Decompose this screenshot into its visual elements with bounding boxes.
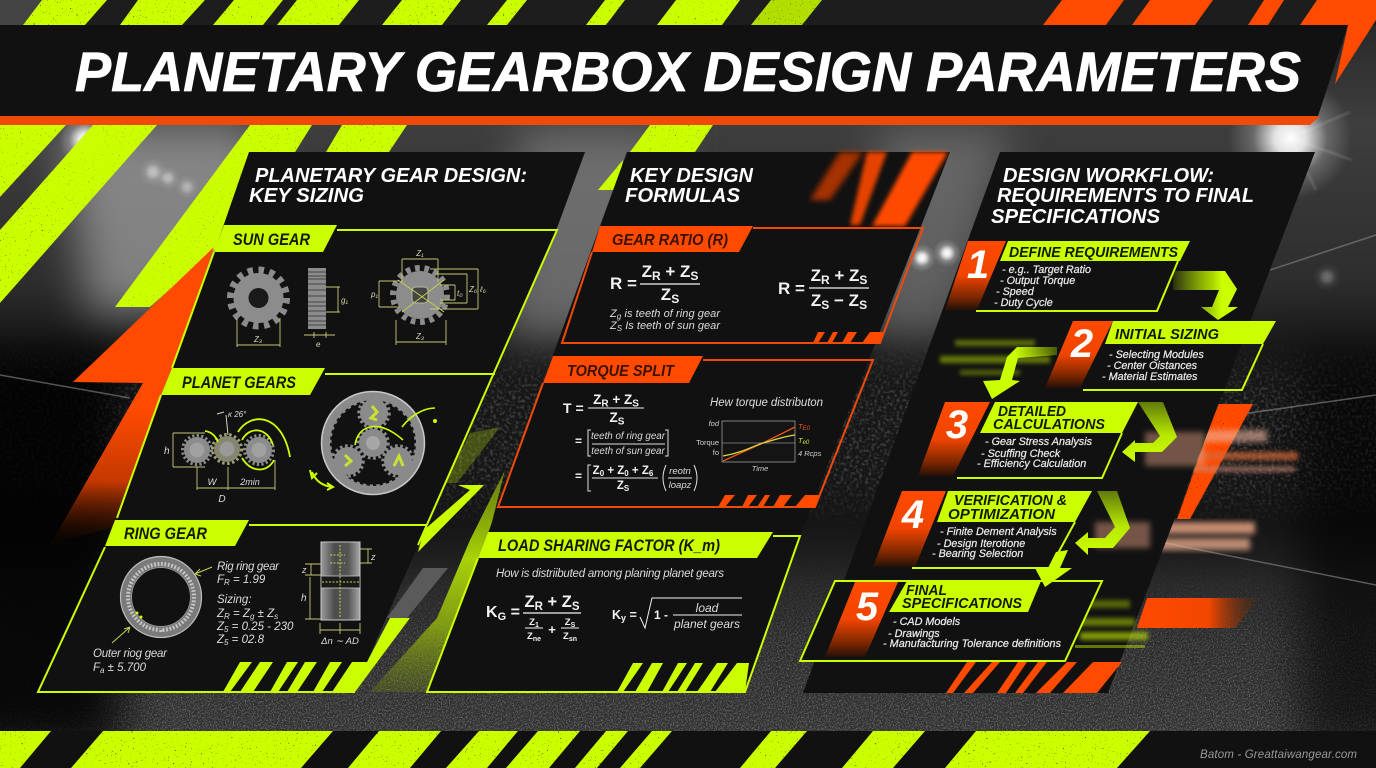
icon: planet gear row with dimensions	[164, 410, 290, 505]
step 5 final specifications: - Drawings	[888, 628, 940, 640]
gear ratio formula right: − Z	[829, 291, 859, 310]
torque formula: + Z	[609, 392, 632, 407]
torque formula: 6	[649, 469, 654, 478]
step 2 initial sizing: 2	[1070, 322, 1093, 366]
arrow: step 2 to 3	[983, 347, 1057, 399]
icon: ring gear	[112, 556, 212, 643]
ring gear notes: 5	[224, 638, 229, 647]
step 1 define requirements: - Duty Cycle	[994, 297, 1053, 309]
step 5 final specifications: SPECIFICATIONS	[902, 596, 1022, 612]
gear ratio formula right: R	[821, 273, 830, 287]
panel heading: SPECIFICATIONS	[991, 206, 1161, 228]
load formula K_G: sn	[569, 636, 577, 643]
torque distribution chart: Hew torque distributon	[710, 397, 823, 409]
blurred motion streaks	[1125, 430, 1298, 550]
torque formula: teeth of ring gear	[591, 431, 666, 442]
ring gear notes	[93, 561, 294, 675]
torque formula	[563, 392, 697, 493]
torque split box	[498, 356, 873, 507]
sun gear tab: SUN GEAR	[233, 231, 310, 249]
icon: ring gear cross section: z	[301, 565, 307, 575]
gear ratio formula right: S	[821, 298, 829, 312]
gear ratio legend	[609, 308, 721, 333]
icon: sun gear dimensioned view: Z₃	[415, 332, 424, 341]
torque formula: + Z	[629, 465, 649, 477]
icon: sun gear dimensioned view: Z₁	[415, 249, 424, 258]
load formula K_G: =	[506, 604, 520, 621]
torque distribution chart: e0	[803, 440, 810, 446]
panel heading: DESIGN WORKFLOW:	[1003, 165, 1214, 187]
gear ratio formula right: Z	[811, 266, 821, 285]
icon: ring gear cross section: Δn ∼ AD	[320, 636, 359, 647]
step 5 final specifications: 5	[856, 585, 879, 629]
torque formula: teeth of sun gear	[591, 446, 666, 457]
gear ratio formula left: Z	[642, 262, 652, 281]
gear ratio formula left: R =	[610, 274, 637, 293]
torque formula: Z	[610, 410, 618, 425]
corner stripes	[223, 618, 410, 692]
step 5 final specifications: - CAD Models	[893, 616, 961, 628]
ring gear notes: = 1.99	[230, 574, 266, 586]
icon: sun gear side view: e	[316, 340, 321, 349]
torque formula: Z	[617, 480, 624, 492]
gear ratio legend: Z	[610, 320, 617, 332]
arrow: step 1 to 2	[1173, 271, 1238, 320]
torque formula: S	[624, 484, 630, 493]
step 2 initial sizing	[1045, 321, 1276, 390]
ring gear notes: = Z	[230, 608, 251, 620]
gear ratio tab: GEAR RATIO (R)	[612, 232, 728, 249]
load formula K_G: +	[548, 622, 556, 637]
icon: planet gear row with dimensions: 2min	[239, 477, 260, 487]
torque distribution chart: fod	[709, 419, 720, 428]
step 2 initial sizing: - Material Estimates	[1102, 371, 1198, 383]
load formula K_G: S	[572, 601, 580, 613]
gear ratio legend: Is teeth of sun gear	[622, 320, 721, 332]
icon: sun gear front view: Z₃	[253, 335, 262, 344]
gear ratio formula left: + Z	[661, 262, 690, 281]
gear ratio legend: S	[617, 324, 623, 333]
corner stripes	[617, 663, 749, 692]
icon: planet gear row with dimensions: W	[208, 477, 218, 488]
panel heading	[625, 165, 754, 207]
load formula K_G: R	[535, 601, 544, 613]
gear ratio formula left	[610, 262, 700, 306]
load formula K_G: S	[571, 622, 576, 629]
load formula K_G: Z	[565, 617, 571, 628]
torque formula: 0	[624, 469, 629, 478]
step 3 detailed calculations: 3	[946, 403, 968, 447]
ring gear notes: R	[224, 612, 230, 621]
load formula K_y	[612, 598, 742, 631]
torque formula: S	[632, 398, 639, 410]
arrow: step 4 to 5	[1035, 550, 1072, 587]
ring gear notes: F	[217, 574, 224, 586]
corner stripes	[813, 332, 883, 343]
panel: key design formulas	[487, 152, 950, 536]
gear ratio formula right: R =	[778, 279, 805, 298]
icon: sun gear side view: g₁	[341, 296, 348, 305]
lime bolt	[418, 485, 484, 552]
torque formula: loapz	[669, 480, 692, 491]
panel heading: PLANETARY GEAR DESIGN:	[255, 165, 527, 187]
ring gear notes: Rig ring gear	[217, 561, 280, 573]
icon: sun gear dimensioned view: p₁	[370, 290, 378, 299]
load formula K_y: =	[626, 608, 637, 622]
gear ratio legend: Z	[610, 308, 617, 320]
gear ratio formula left: S	[690, 269, 698, 283]
gear ratio formula right: S	[859, 273, 867, 287]
icon: sun gear side view	[304, 268, 348, 349]
arrow: step 3 feedback	[1122, 402, 1177, 462]
planet gears tab: PLANET GEARS	[182, 374, 296, 392]
panel heading: FORMULAS	[625, 185, 741, 207]
ring gear notes: Z	[217, 608, 224, 620]
panel heading	[991, 165, 1254, 228]
step 2 initial sizing: - Selecting Modules	[1109, 349, 1204, 361]
torque formula: 0	[600, 469, 605, 478]
step 1 define requirements: 1	[967, 243, 989, 287]
load formula K_y: load	[696, 601, 719, 615]
load formula K_G: Z	[563, 631, 569, 642]
torque formula: Z	[593, 465, 600, 477]
ring gear notes: ± 5.700	[104, 662, 147, 674]
step 3 detailed calculations: - Scuffing Check	[981, 448, 1061, 460]
step 1 define requirements: DEFINE REQUIREMENTS	[1009, 245, 1178, 261]
torque distribution chart: 4 Rcps	[798, 449, 822, 458]
step 3 detailed calculations: - Gear Stress Analysis	[985, 436, 1093, 448]
ring gear tab: RING GEAR	[124, 525, 207, 543]
gear ratio formula right: + Z	[830, 266, 859, 285]
torque formula: =	[575, 434, 582, 448]
load formula K_G: K	[486, 604, 498, 621]
panel heading: KEY SIZING	[249, 185, 364, 207]
icon: ring gear cross section	[301, 542, 376, 647]
step 4 verification and optimization	[873, 491, 1092, 568]
ring gear notes: = 02.8	[228, 634, 265, 646]
step 2 initial sizing: INITIAL SIZING	[1115, 326, 1219, 343]
ring gear notes: F	[93, 662, 100, 674]
step 3 detailed calculations: CALCULATIONS	[993, 417, 1105, 433]
torque split tab: TORQUE SPLIT	[567, 363, 675, 380]
gear ratio tab	[592, 226, 753, 252]
load formula K_G: + Z	[543, 593, 572, 611]
ring gear notes: Outer riog gear	[93, 648, 168, 660]
torque distribution chart: T	[798, 422, 803, 431]
step 3 detailed calculations: - Efficiency Calculation	[977, 458, 1086, 470]
gear ratio formula right: Z	[811, 291, 821, 310]
torque formula: S	[618, 416, 625, 428]
load formula K_y: K	[612, 608, 621, 622]
gear ratio formula left: Z	[661, 285, 671, 304]
step 4 verification and optimization: - Design Iterotione	[937, 538, 1025, 550]
load formula K_G: G	[498, 611, 506, 623]
step 5 final specifications	[800, 581, 1102, 661]
icon: sun gear dimensioned view: Z₆	[468, 285, 478, 294]
icon: sun gear dimensioned view: ℓ₆	[479, 285, 487, 294]
icon: ring gear cross section: h	[301, 593, 307, 604]
icon: planet gear row with dimensions: D	[218, 494, 226, 505]
torque formula: =	[575, 469, 582, 483]
gear ratio formula left: S	[671, 292, 679, 306]
step 2 initial sizing: - Center Oistances	[1107, 360, 1198, 372]
title banner	[0, 25, 1348, 125]
panel heading	[249, 165, 527, 207]
torque distribution chart: fo	[713, 448, 719, 457]
step 4 verification and optimization: VERIFICATION &	[954, 493, 1067, 509]
step 5 final specifications: FINAL	[906, 583, 947, 599]
step 1 define requirements: - Speed	[996, 286, 1035, 298]
ring gear notes: = 0.25 - 230	[228, 621, 294, 633]
load formula K_y: 1 -	[654, 608, 668, 622]
ring gear notes: s	[274, 612, 278, 621]
orange streaks	[810, 152, 948, 226]
load formula K_G	[486, 593, 581, 643]
ring gear notes: Z	[217, 634, 224, 646]
panel: planetary gear design key sizing	[38, 152, 585, 692]
load formula K_y: y	[621, 613, 626, 623]
icon: sun gear front view	[230, 270, 286, 347]
bottom hazard stripes band	[0, 731, 1376, 768]
panel heading: REQUIREMENTS TO FINAL	[997, 185, 1254, 207]
corner stripes	[718, 495, 819, 507]
icon: ring gear cross section: z	[370, 552, 376, 562]
load formula K_G: Z	[525, 593, 535, 611]
gear ratio box	[562, 226, 923, 343]
torque formula: reotn	[669, 466, 691, 477]
ring gear notes: a	[100, 666, 105, 675]
torque distribution chart: E0	[803, 426, 811, 432]
torque split tab	[543, 356, 703, 383]
ring gear notes: R	[224, 578, 230, 587]
ring gear notes: Z	[217, 621, 224, 633]
step 3 detailed calculations: DETAILED	[998, 404, 1066, 420]
load formula K_G: Z	[527, 631, 533, 642]
load formula K_y: planet gears	[673, 617, 740, 631]
step 4 verification and optimization: - Finite Dement Analysis	[940, 526, 1057, 538]
icon: planet gear row with dimensions: κ 26°	[228, 410, 247, 419]
torque formula: Z	[593, 392, 601, 407]
step 4 verification and optimization: - Bearing Selection	[932, 548, 1023, 560]
arrow: step 4 feedback	[1075, 491, 1130, 555]
icon: planet gear row with dimensions: h	[164, 446, 170, 457]
ring gear notes: g	[250, 612, 255, 621]
sun gear tab	[214, 225, 337, 252]
more motion streaks	[940, 340, 1205, 648]
ring gear notes: 5	[224, 625, 229, 634]
load formula K_G: ne	[533, 636, 541, 643]
source credit: Batom - Greattaiwangear.com	[1200, 749, 1357, 761]
step 1 define requirements	[945, 241, 1190, 311]
panel heading: KEY DESIGN	[630, 165, 754, 187]
torque distribution chart: Torque	[696, 438, 719, 447]
planet gears tab	[161, 368, 325, 395]
torque distribution chart	[696, 397, 823, 473]
top hazard stripes band	[0, 0, 1376, 84]
step 5 final specifications: - Manufacturing Tolerance definitions	[883, 638, 1062, 650]
icon: sun gear dimensioned view: t₀	[457, 289, 463, 298]
torque formula: R	[601, 398, 609, 410]
load sharing description: How is distriibuted among planing planet gears	[496, 568, 724, 580]
gear ratio formula left: R	[652, 269, 661, 283]
panel: load sharing factor	[427, 532, 800, 692]
torque distribution chart: T	[798, 436, 803, 445]
gear ratio formula right	[778, 266, 869, 312]
step 4 verification and optimization: OPTIMIZATION	[948, 507, 1056, 523]
load sharing tab	[478, 532, 773, 558]
load formula K_G: 1	[535, 622, 539, 629]
gear ratio formula right: S	[859, 298, 867, 312]
ring gear notes: Sizing:	[217, 594, 252, 606]
gear ratio legend: is teeth of ring gear	[621, 308, 721, 320]
title: PLANETARY GEARBOX DESIGN PARAMETERS	[75, 40, 1301, 103]
step 3 detailed calculations	[918, 402, 1138, 478]
step 1 define requirements: - e.g.. Target Ratio	[1002, 264, 1091, 276]
gear ratio legend: g	[617, 312, 622, 321]
step 4 verification and optimization: 4	[901, 493, 924, 537]
torque formula: + Z	[604, 465, 624, 477]
icon: planetary gear set	[310, 392, 437, 494]
panel: design workflow	[800, 152, 1315, 693]
ring gear notes: ± Z	[254, 608, 275, 620]
corner stripes	[946, 662, 1122, 693]
ring gear tab	[105, 520, 249, 546]
decorative lime and orange diagonal stripes	[0, 125, 1260, 692]
step 1 define requirements: - Output Torque	[1000, 275, 1075, 287]
load formula K_G: Z	[529, 617, 535, 628]
icon: sun gear dimensioned view	[370, 249, 487, 345]
torque distribution chart: Time	[752, 464, 768, 473]
torque formula: T =	[563, 400, 584, 416]
load sharing tab: LOAD SHARING FACTOR (K_m)	[498, 537, 720, 555]
